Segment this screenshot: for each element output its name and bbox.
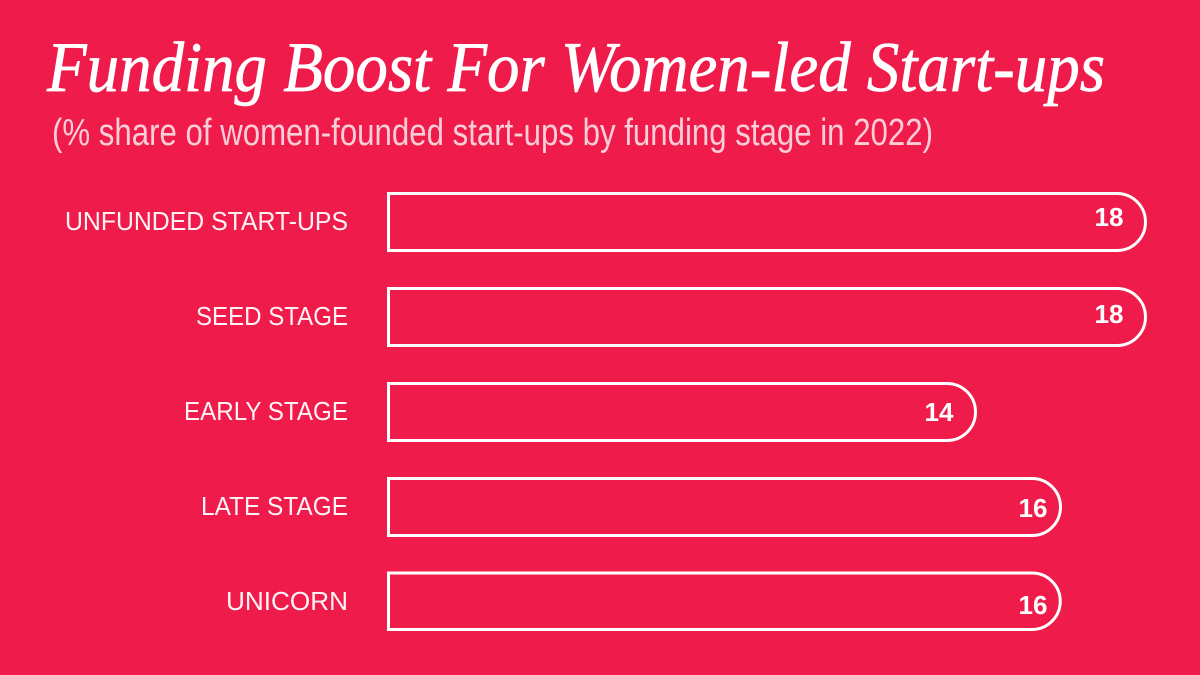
bar row: seed stage: SEED STAGE: [196, 301, 348, 331]
title: Funding Boost For Women-led Start-ups: [46, 29, 1105, 107]
bar row: unfunded start-ups: UNFUNDED START-UPS: [65, 206, 348, 236]
bar row: unicorn: UNICORN: [226, 586, 348, 616]
bar row: late stage: 16: [1019, 493, 1047, 523]
subtitle: (% share of women-founded start-ups by funding stage in 2022): [52, 112, 933, 154]
bar row: unicorn: 16: [1019, 590, 1047, 620]
bar row: unfunded start-ups: [65, 194, 1146, 250]
bar row: early stage: 14: [925, 397, 954, 427]
bar row: unicorn: [226, 573, 1060, 630]
bar row: seed stage: 18: [1095, 299, 1123, 329]
bar row: late stage: [201, 478, 1060, 536]
bar row: late stage: LATE STAGE: [201, 491, 348, 521]
bar row: early stage: [184, 384, 976, 440]
bar row: seed stage: [196, 288, 1146, 346]
bar row: early stage: EARLY STAGE: [184, 396, 348, 426]
bar row: unfunded start-ups: 18: [1095, 202, 1123, 232]
